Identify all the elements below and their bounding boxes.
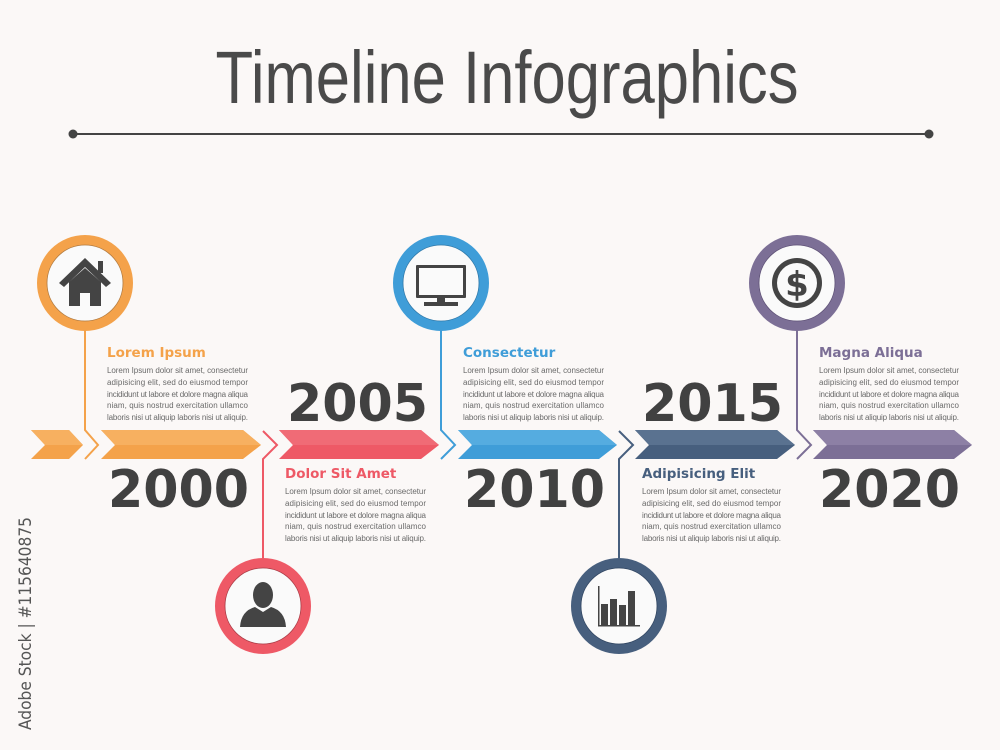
text block: Dolor Sit Amet: Lorem Ipsum dolor sit amet, consectetur xyxy=(285,487,426,496)
text block: Consectetur: laboris nisi ut aliquip laboris nisi ut aliquip. xyxy=(463,413,604,422)
years xyxy=(108,374,960,520)
icon circle: house xyxy=(42,240,128,326)
icon circle: dollar xyxy=(754,240,840,326)
connector: orange xyxy=(85,330,98,459)
text block: Lorem Ipsum: Lorem Ipsum xyxy=(107,345,206,361)
icon circle: chart xyxy=(576,563,662,649)
year 2000: 2000 xyxy=(108,460,249,520)
text block: Lorem Ipsum: niam, quis nostrud exercitation ullamco xyxy=(107,401,249,410)
connector: red xyxy=(263,431,277,558)
watermark side text: Adobe Stock | #115640875 xyxy=(16,517,36,730)
connector: purple xyxy=(797,330,811,459)
text block: Adipisicing Elit xyxy=(642,466,782,543)
icon: person xyxy=(240,582,286,627)
text block: Dolor Sit Amet: laboris nisi ut aliquip laboris nisi ut aliquip. xyxy=(285,534,426,543)
year 2015: 2015 xyxy=(642,374,783,434)
text block: Magna Aliqua: adipisicing elit, sed do eiusmod tempor xyxy=(819,378,959,387)
text block: Magna Aliqua xyxy=(819,345,960,422)
text block: Lorem Ipsum: laboris nisi ut aliquip laboris nisi ut aliquip. xyxy=(107,413,248,422)
icon circle: monitor xyxy=(398,240,484,326)
text block: Dolor Sit Amet xyxy=(285,466,427,543)
text block: Consectetur: Lorem Ipsum dolor sit amet, consectetur xyxy=(463,366,604,375)
year 2010: 2010 xyxy=(464,460,605,520)
text block: Lorem Ipsum xyxy=(107,345,249,422)
arrow: 2000 orange xyxy=(101,430,261,459)
text block: Consectetur xyxy=(463,345,605,422)
timeline arrows xyxy=(31,430,972,459)
arrow: 2015 dark blue xyxy=(635,430,795,459)
icon: monitor xyxy=(416,265,466,306)
text block: Consectetur: niam, quis nostrud exercitation ullamco xyxy=(463,401,605,410)
text block: Adipisicing Elit: adipisicing elit, sed do eiusmod tempor xyxy=(642,499,781,508)
text block: Consectetur: Consectetur xyxy=(463,345,556,361)
text block: Dolor Sit Amet: adipisicing elit, sed do eiusmod tempor xyxy=(285,499,426,508)
text block: Lorem Ipsum: Lorem Ipsum dolor sit amet, consectetur xyxy=(107,366,248,375)
text block: Adipisicing Elit: laboris nisi ut aliquip laboris nisi ut aliquip. xyxy=(642,534,781,543)
icon: dollar coin: $ xyxy=(785,265,809,305)
text block: Adipisicing Elit: incididunt ut labore et dolore magna aliqua xyxy=(642,511,782,520)
year 2020: 2020 xyxy=(819,460,960,520)
text block: Adipisicing Elit: niam, quis nostrud exercitation ullamco xyxy=(642,522,782,531)
text block: Consectetur: adipisicing elit, sed do eiusmod tempor xyxy=(463,378,604,387)
text block: Adipisicing Elit: Lorem Ipsum dolor sit amet, consectetur xyxy=(642,487,781,496)
text block: Magna Aliqua: Lorem Ipsum dolor sit amet, consectetur xyxy=(819,366,959,375)
title: Timeline Infographics xyxy=(216,36,798,119)
year 2005: 2005 xyxy=(287,374,428,434)
title underline xyxy=(68,130,934,138)
text block: Adipisicing Elit: Adipisicing Elit xyxy=(642,466,756,482)
text block: Magna Aliqua: niam, quis nostrud exercitation ullamco xyxy=(819,401,960,410)
text block: Dolor Sit Amet: niam, quis nostrud exercitation ullamco xyxy=(285,522,427,531)
icon: bar chart xyxy=(598,586,640,626)
arrow: 2005 red xyxy=(279,430,439,459)
arrow: 2020 purple xyxy=(813,430,972,459)
text block: Lorem Ipsum: incididunt ut labore et dolore magna aliqua xyxy=(107,390,249,399)
arrow: start orange xyxy=(31,430,83,459)
text block: Magna Aliqua: laboris nisi ut aliquip laboris nisi ut aliquip. xyxy=(819,413,959,422)
text block: Lorem Ipsum: adipisicing elit, sed do eiusmod tempor xyxy=(107,378,248,387)
text block: Dolor Sit Amet: Dolor Sit Amet xyxy=(285,466,397,482)
text block: Magna Aliqua: incididunt ut labore et dolore magna aliqua xyxy=(819,390,960,399)
text block: Magna Aliqua: Magna Aliqua xyxy=(819,345,923,361)
icon circle: person xyxy=(220,563,306,649)
connector: blue xyxy=(441,330,455,459)
text block: Dolor Sit Amet: incididunt ut labore et dolore magna aliqua xyxy=(285,511,427,520)
connector: dark blue xyxy=(619,431,633,558)
text block: Consectetur: incididunt ut labore et dolore magna aliqua xyxy=(463,390,605,399)
arrow: 2010 blue xyxy=(458,430,617,459)
icon: house xyxy=(59,258,111,306)
